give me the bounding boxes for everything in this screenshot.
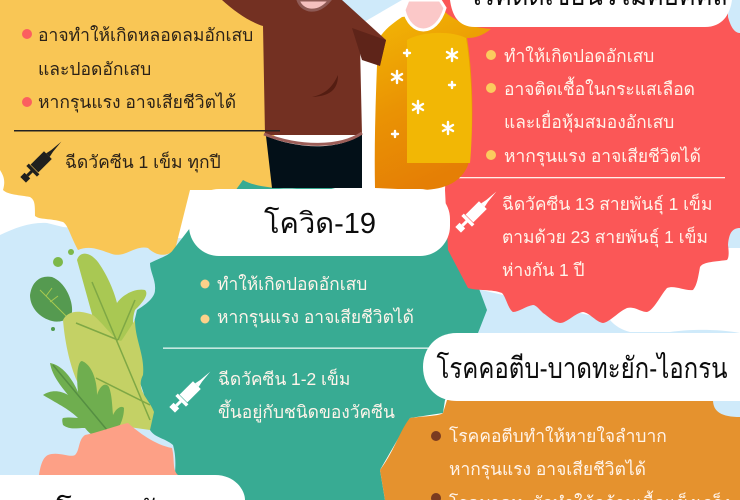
panel: green COVID-19 <box>130 180 490 500</box>
panel: green COVID-19: ขึ้นอยู่กับชนิดของวัคซีน <box>218 399 395 423</box>
diphtheria bullets: หากรุนแรง อาจเสียชีวิตได้ <box>449 459 646 480</box>
icon: syringe black <box>18 136 67 185</box>
snow stars on dress <box>392 49 457 137</box>
icon: syringe white on green <box>167 366 216 415</box>
vaccine text covid: ฉีดวัคซีน 1-2 เข็ม <box>218 368 350 389</box>
pneumococcal bullets: และเยื่อหุ้มสมองอักเสบ <box>504 110 674 133</box>
panel: yellow influenza <box>0 0 280 255</box>
panel: red pneumococcal: ตามด้วย 23 สายพันธุ์ 1 เข็ม <box>502 226 708 248</box>
covid bullets <box>200 274 414 328</box>
vaccine text influenza: ฉีดวัคซีน 1 เข็ม ทุกปี <box>65 151 221 173</box>
pneumococcal bullets: ทำให้เกิดปอดอักเสบ <box>504 46 654 66</box>
diphtheria bullets <box>431 426 731 500</box>
influenza bullets: และปอดอักเสบ <box>38 59 151 79</box>
influenza bullets: หากรุนแรง อาจเสียชีวิตได้ <box>38 92 236 113</box>
illustration: salmon mound <box>39 423 178 475</box>
covid bullets: หากรุนแรง อาจเสียชีวิตได้ <box>217 307 414 328</box>
pill heading: shingles <box>0 475 245 500</box>
icon: syringe white on red <box>453 186 502 235</box>
pneumococcal bullets <box>486 46 701 167</box>
pneumococcal bullets: อาจติดเชื้อในกระแสเลือด <box>504 76 695 99</box>
panel: orange diphtheria <box>380 400 740 500</box>
covid bullets: ทำให้เกิดปอดอักเสบ <box>217 274 367 294</box>
illustration: leaves <box>30 249 154 439</box>
pill heading: pneumococcal <box>450 0 732 27</box>
diphtheria bullets: โรคคอตีบทำให้หายใจลำบาก <box>449 426 667 446</box>
pill heading: diphtheria <box>423 333 740 401</box>
influenza bullets <box>22 25 253 113</box>
pill heading: COVID-19 <box>189 189 450 256</box>
illustration: grandmother <box>375 0 491 190</box>
illustration: grandfather <box>222 0 386 188</box>
pill heading: COVID-19: โควิด-19 <box>264 206 376 240</box>
vaccine text pneumococcal: ฉีดวัคซีน 13 สายพันธุ์ 1 เข็ม <box>502 193 712 215</box>
influenza bullets: อาจทำให้เกิดหลอดลมอักเสบ <box>38 25 253 45</box>
panel: red pneumococcal: ห่างกัน 1 ปี <box>502 260 585 280</box>
pneumococcal bullets: หากรุนแรง อาจเสียชีวิตได้ <box>504 146 701 167</box>
panel: red pneumococcal <box>440 0 740 323</box>
